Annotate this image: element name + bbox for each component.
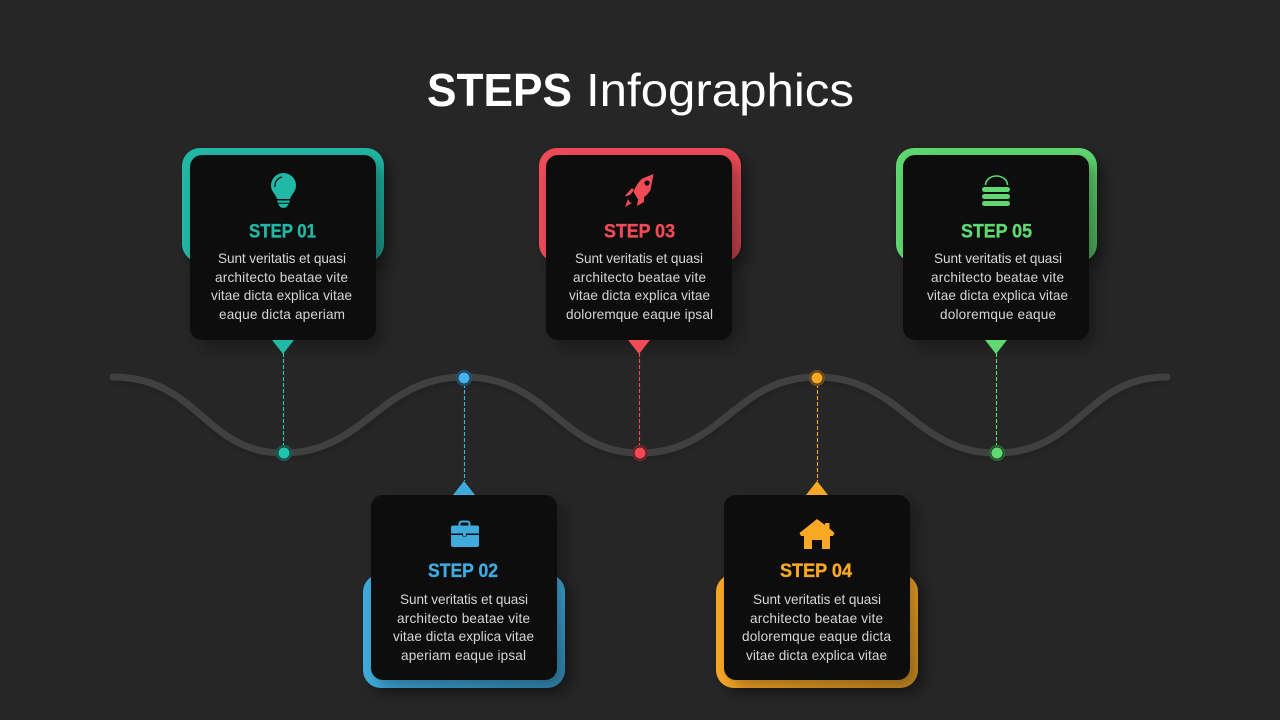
step 03 card [539, 148, 741, 354]
step 04 heading: STEP 04 [780, 561, 852, 582]
step 05 text [927, 251, 1068, 322]
step 04 text [742, 592, 891, 663]
step 03 frame [539, 148, 741, 262]
step 02 heading: STEP 02 [428, 561, 498, 582]
step 03 text: architecto beatae vite [573, 270, 706, 285]
step 01 text: eaque dicta aperiam [219, 307, 345, 322]
step 05 connector [989, 353, 1005, 461]
step 04 frame [716, 574, 918, 688]
step 02 text: vitae dicta explica vitae [393, 629, 534, 644]
step 02 text: Sunt veritatis et quasi [400, 592, 528, 607]
step 01 frame [182, 148, 384, 262]
icon: rocket [625, 174, 654, 207]
wavy timeline [113, 377, 1167, 453]
icon: light bulb [271, 173, 296, 208]
step 02 panel [371, 495, 557, 680]
step 02 frame [363, 574, 565, 688]
step 02 card [363, 481, 565, 688]
step 04 card [716, 481, 918, 688]
step 03 text: vitae dicta explica vitae [569, 288, 710, 303]
step 05 text: architecto beatae vite [931, 270, 1064, 285]
step 05 text: doloremque eaque [940, 307, 1056, 322]
step 03 panel [546, 155, 732, 340]
step 05 text: Sunt veritatis et quasi [934, 251, 1062, 266]
step 01 card [182, 148, 384, 354]
step 02 text [393, 592, 534, 663]
step 03 heading: STEP 03 [604, 222, 675, 242]
step 05 frame [896, 148, 1097, 262]
step 01 connector [276, 353, 292, 461]
step 04 connector [809, 370, 825, 481]
step 01 heading: STEP 01 [249, 222, 316, 242]
step 03 text: doloremque eaque ipsal [566, 307, 713, 322]
step 01 text: vitae dicta explica vitae [211, 288, 352, 303]
title [427, 64, 854, 116]
step 03 connector [632, 353, 648, 461]
step 01 text: architecto beatae vite [215, 270, 348, 285]
step 02 pointer [453, 481, 475, 495]
step 02 text: aperiam eaque ipsal [401, 648, 526, 663]
step 04 pointer [806, 481, 828, 495]
step 04 text: doloremque eaque dicta [742, 629, 891, 644]
step 04 text: Sunt veritatis et quasi [753, 592, 881, 607]
step 05 text: vitae dicta explica vitae [927, 288, 1068, 303]
step 01 text: Sunt veritatis et quasi [218, 251, 346, 266]
step 04 panel [724, 495, 910, 680]
step 02 text: architecto beatae vite [397, 611, 530, 626]
step 03 text [566, 251, 713, 322]
step 01 panel [190, 155, 376, 340]
step 05 panel [903, 155, 1089, 340]
icon: briefcase [451, 522, 479, 547]
step 05 heading: STEP 05 [961, 222, 1032, 242]
step 03 text: Sunt veritatis et quasi [575, 251, 703, 266]
step 04 text: vitae dicta explica vitae [746, 648, 887, 663]
icon: house [800, 519, 834, 549]
step 03 pointer [628, 340, 650, 354]
step 05 pointer [985, 340, 1007, 354]
icon: basket [982, 176, 1010, 206]
step 05 card [896, 148, 1097, 354]
title: Infographics [586, 64, 854, 116]
step 01 pointer [272, 340, 294, 354]
title: STEPS [427, 64, 572, 116]
step 04 text: architecto beatae vite [750, 611, 883, 626]
step 02 connector [456, 370, 472, 481]
step 01 text [211, 251, 352, 322]
